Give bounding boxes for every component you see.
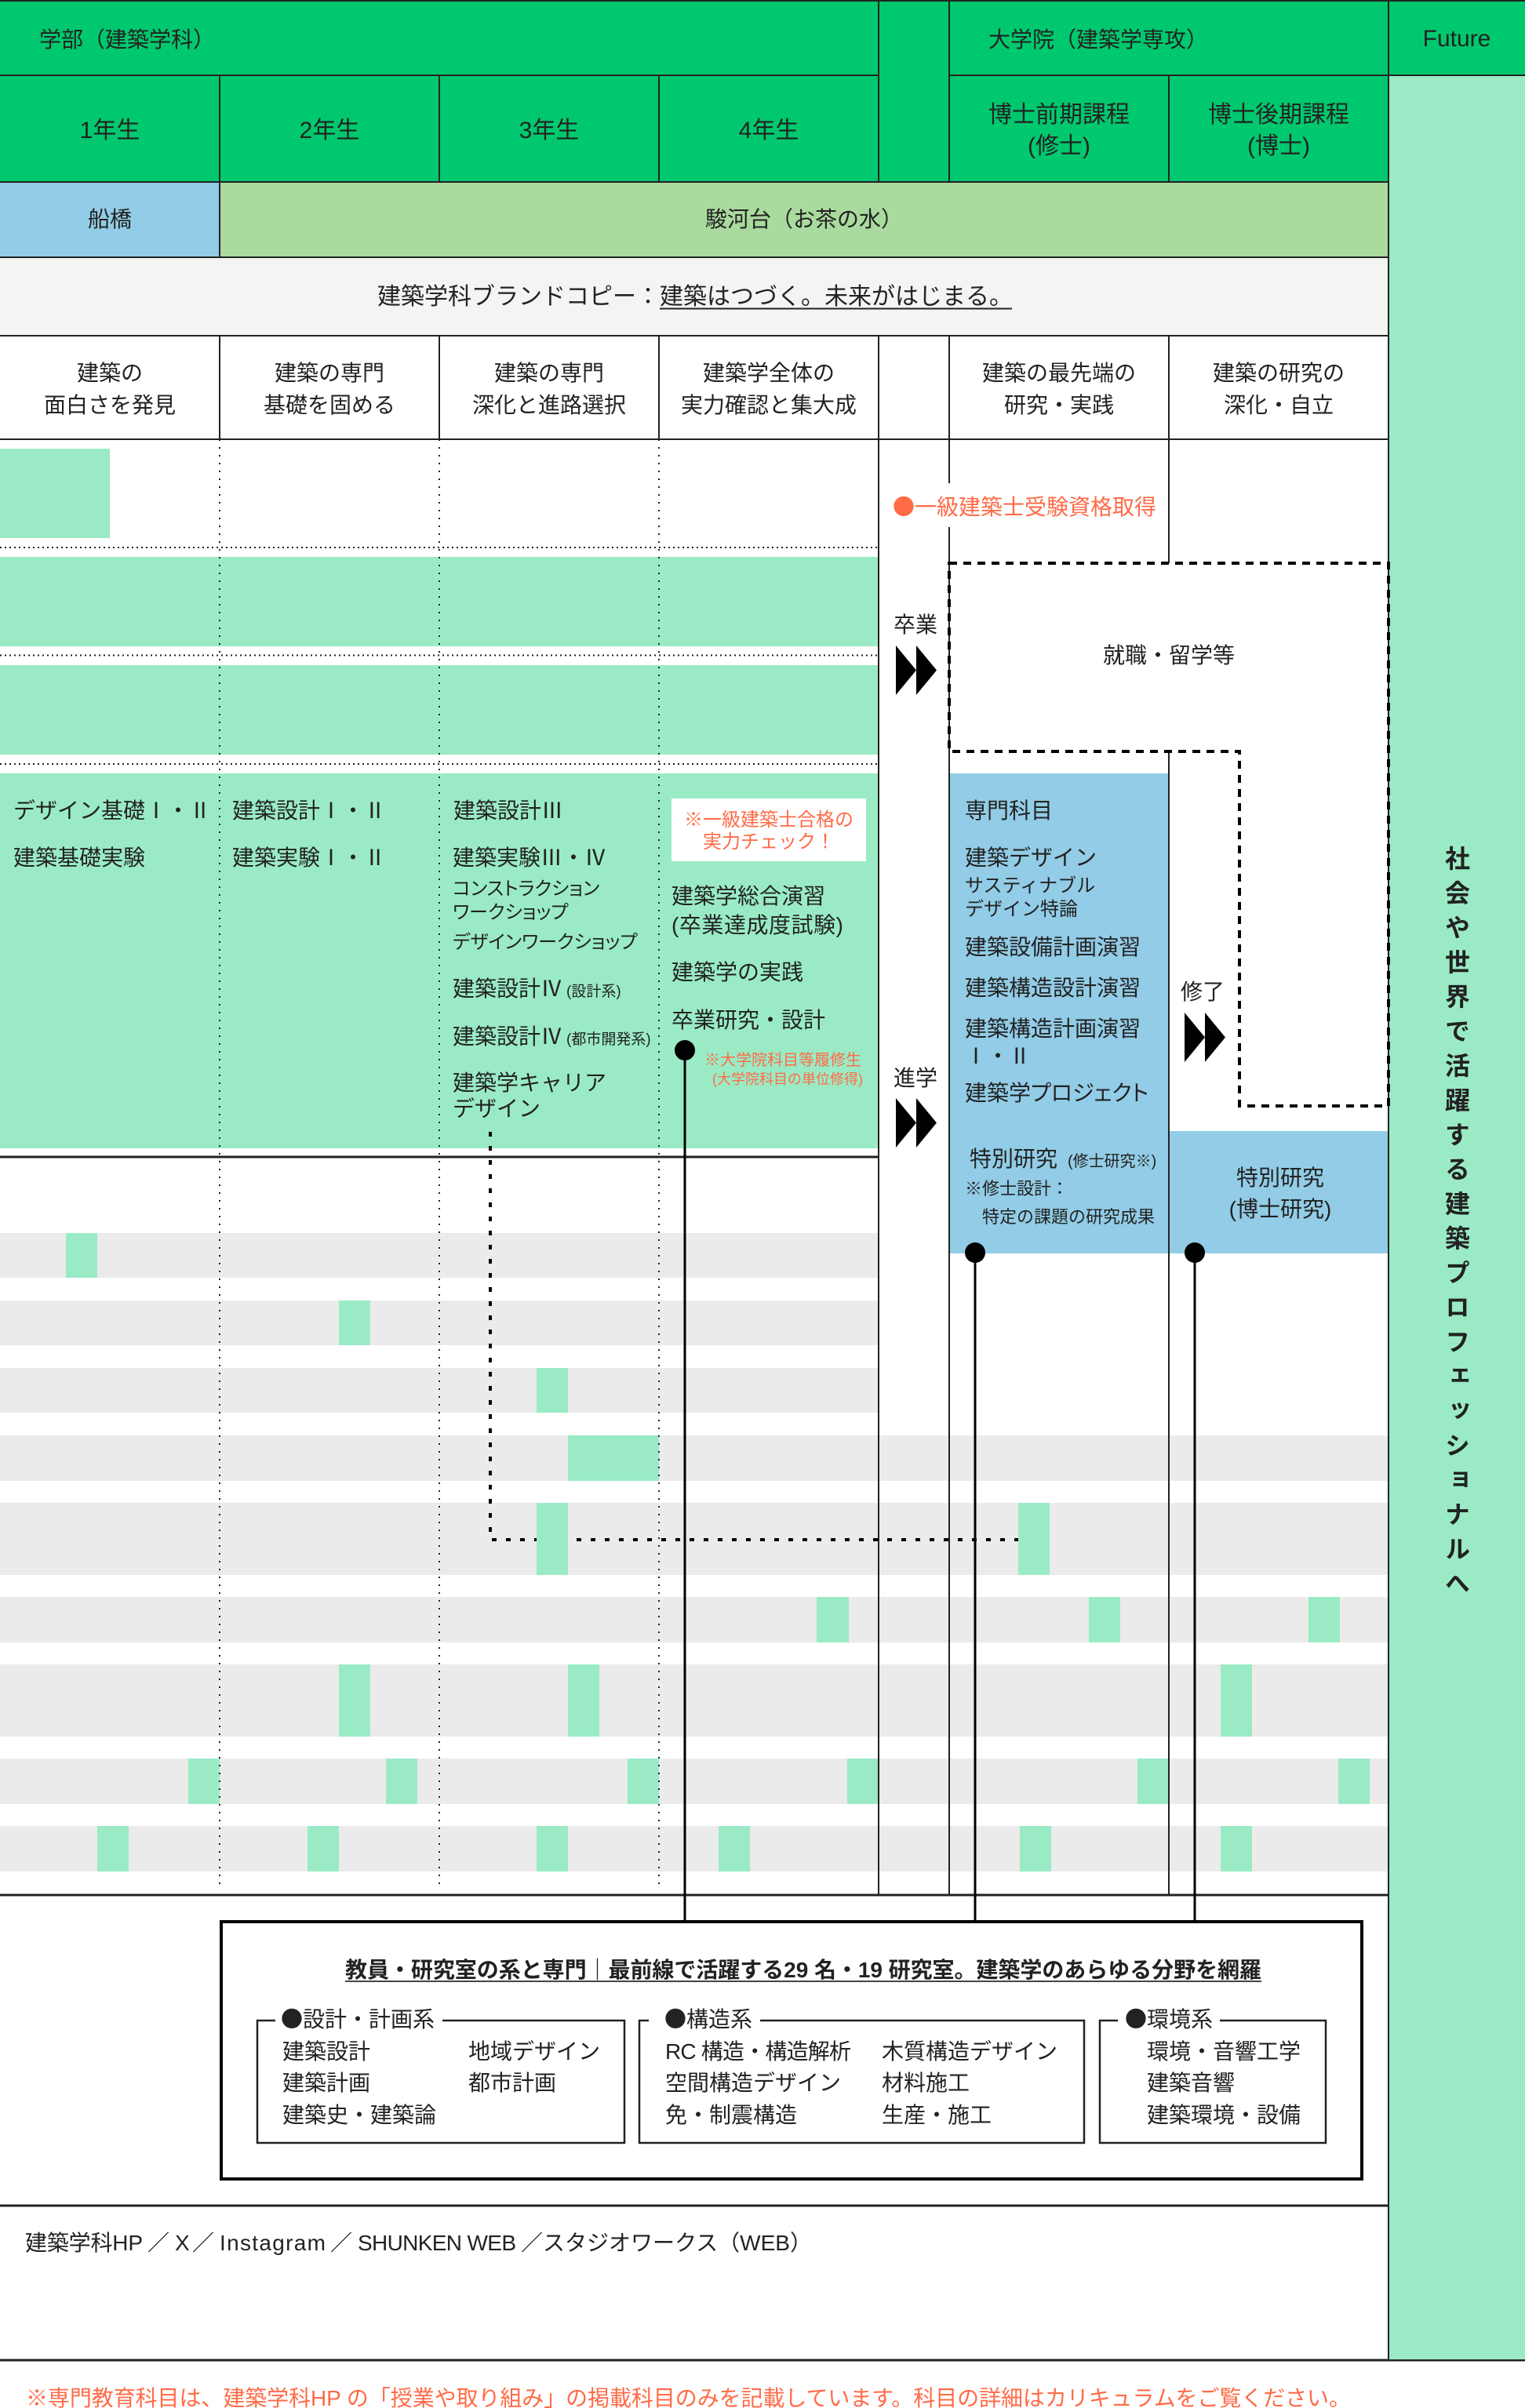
text: year 2 subjects: 建築設計Ⅰ・Ⅱ <box>232 798 386 823</box>
text: vertical future statement: 社会や世界で活躍する建築プロフェッショナルへ <box>1442 846 1470 1605</box>
text: year 3 subjects: デザインワークショップ <box>453 932 638 953</box>
text: links: X <box>175 2231 190 2255</box>
panel: design and planning group: 地域デザイン <box>468 2039 600 2064</box>
text: links: ／ <box>330 2231 352 2255</box>
text: goal year 3: 建築の専門 <box>494 361 604 385</box>
text: year 3 subjects <box>453 798 651 1121</box>
panel: brand copy: 建築学科ブランドコピー：建築はつづく。未来がはじまる。 <box>377 284 1013 310</box>
panel: future column <box>1389 76 1525 2360</box>
text: year 1 subjects <box>13 798 211 870</box>
panel: design and planning group: 建築計画 <box>282 2071 370 2095</box>
panel: environment group: 建築環境・設備 <box>1147 2103 1301 2127</box>
panel: environment group: 建築音響 <box>1147 2071 1235 2095</box>
text: goal year 1: 建築の <box>77 361 143 385</box>
heading: faculty title: 教員・研究室の系と専門｜最前線で活躍する29 名・19 研究室。建築学のあらゆる分野を網羅 <box>345 1958 1261 1982</box>
text: goal master: 建築の最先端の <box>982 361 1136 385</box>
callout: graduate subject credits <box>704 1051 863 1087</box>
panel: structures group: 材料施工 <box>882 2071 970 2095</box>
panel: header years and programmes <box>0 0 1525 182</box>
callout: graduate subject credits: ※大学院科目等履修生 <box>704 1051 861 1069</box>
arrow: advance to graduate school: 進学 <box>894 1066 937 1090</box>
text: goal doctor: 深化・自立 <box>1224 393 1334 417</box>
panel: structures group: 生産・施工 <box>882 2103 992 2127</box>
text: master subjects: 建築構造設計演習 <box>965 976 1141 1000</box>
text: links: ／ <box>521 2231 543 2255</box>
heading: graduate school: 大学院（建築学専攻） <box>988 27 1208 52</box>
text: year 3 subjects: コンストラクション <box>453 878 600 900</box>
text: master subjects: 建築構造計画演習 <box>965 1017 1141 1041</box>
label: Surugadai campus: 駿河台（お茶の水） <box>705 207 903 231</box>
text: year 4 subjects: 建築学総合演習 <box>672 884 825 908</box>
text: year 2 subjects: 建築実験Ⅰ・Ⅱ <box>232 846 386 870</box>
chart: mint activity markers <box>66 1233 1370 1871</box>
text: links <box>25 2231 812 2255</box>
label: year 4: 4年生 <box>739 118 799 144</box>
text: master subjects: 専門科目 <box>965 798 1053 823</box>
callout: architect exam check <box>672 798 866 861</box>
text: links: 建築学科HP <box>25 2231 143 2255</box>
label: doctoral course: 博士後期課程 <box>1208 102 1349 128</box>
arrow: master completion: 修了 <box>1181 980 1225 1004</box>
text: master subjects: ※修士設計： <box>965 1179 1068 1199</box>
text: year 4 subjects <box>672 884 843 1032</box>
label: doctoral course: (博士) <box>1247 133 1310 159</box>
text: master subjects <box>965 798 1156 1227</box>
arrow: master completion <box>1181 980 1225 1062</box>
label: Funabashi campus: 船橋 <box>88 207 132 231</box>
text: year 3 subjects: 建築実験Ⅲ・Ⅳ <box>453 846 606 870</box>
text: goal doctor: 建築の研究の <box>1213 361 1345 385</box>
text: year 2 subjects <box>232 798 386 870</box>
text: year 3 subjects: 建築設計Ⅳ (都市開発系) <box>453 1024 651 1049</box>
callout: graduate subject credits: (大学院科目の単位修得) <box>712 1071 863 1087</box>
panel: environment group: ●環境系 <box>1125 2002 1213 2034</box>
panel: structures group <box>639 2002 1084 2143</box>
chart: mint subject bands <box>0 449 879 1148</box>
label: master course: (修士) <box>1028 133 1090 159</box>
text: links: ／ <box>147 2231 169 2255</box>
text: links: スタジオワークス（WEB） <box>543 2231 812 2255</box>
text: year 4 subjects: 卒業研究・設計 <box>672 1008 825 1032</box>
label: year 2: 2年生 <box>300 118 359 144</box>
text: year 3 subjects: 建築設計Ⅲ <box>453 798 563 823</box>
text: links: ／ <box>192 2231 214 2255</box>
panel: design and planning group: 建築史・建築論 <box>282 2103 436 2127</box>
text: year 3 subjects: ワークショップ <box>453 902 569 923</box>
text: master subjects: デザイン特論 <box>965 899 1078 920</box>
text: master subjects: 建築デザイン <box>965 846 1097 870</box>
text: year 3 subjects: 建築設計Ⅳ (設計系) <box>453 977 621 1001</box>
text: goal year 2: 基礎を固める <box>264 393 395 417</box>
text: master subjects: Ⅰ・Ⅱ <box>965 1044 1031 1068</box>
callout: first-class architect qualification: ●一級建築士受験資格取得 <box>893 490 1156 522</box>
text: master subjects: 特別研究 (修士研究※) <box>970 1147 1156 1171</box>
callout: architect exam check: ※一級建築士合格の <box>684 809 853 831</box>
panel: environment group <box>1100 2002 1326 2143</box>
label: year 3: 3年生 <box>519 118 579 144</box>
panel: design and planning group: 建築設計 <box>282 2039 370 2064</box>
panel: structures group: 空間構造デザイン <box>665 2071 841 2095</box>
text: goal year 4: 建築学全体の <box>703 361 835 385</box>
text: doctoral research: 特別研究 <box>1236 1166 1324 1190</box>
text: year 1 subjects: 建築基礎実験 <box>13 846 145 870</box>
text: year 1 subjects: デザイン基礎Ⅰ・Ⅱ <box>13 798 211 823</box>
panel: campus row <box>0 182 1389 257</box>
arrow: graduation <box>894 613 937 695</box>
heading: undergraduate: 学部（建築学科） <box>39 27 215 52</box>
panel: year goals <box>0 336 1389 439</box>
text: goal year 3: 深化と進路選択 <box>472 393 626 417</box>
panel: design and planning group: ●設計・計画系 <box>281 2002 435 2034</box>
connector: master line to faculty box <box>965 1242 985 1920</box>
panel: structures group: RC 構造・構造解析 <box>665 2039 851 2064</box>
text: year 3 subjects: 建築学キャリア <box>453 1071 606 1095</box>
connector: doctoral line to faculty box <box>1185 1242 1205 1920</box>
panel: brand copy <box>0 258 1389 336</box>
heading: future: Future <box>1423 26 1490 52</box>
text: master subjects: 特定の課題の研究成果 <box>982 1207 1155 1227</box>
text: doctoral research: (博士研究) <box>1229 1197 1331 1221</box>
panel: employment dashed area <box>949 563 1389 1106</box>
panel: structures group: 免・制震構造 <box>665 2103 797 2127</box>
label: year 1: 1年生 <box>80 118 140 144</box>
text: year 4 subjects: 建築学の実践 <box>672 960 803 984</box>
panel: structures group: ●構造系 <box>664 2002 752 2034</box>
text: master subjects: 建築設備計画演習 <box>965 935 1141 959</box>
text: goal year 4: 実力確認と集大成 <box>681 393 857 417</box>
arrow: advance to graduate school <box>894 1066 937 1148</box>
chart: gray activity bands <box>0 1233 1389 1871</box>
panel: design and planning group <box>257 2002 624 2143</box>
panel: structures group: 木質構造デザイン <box>882 2039 1057 2064</box>
text: goal year 1: 面白さを発見 <box>44 393 176 417</box>
panel: graduate blue blocks <box>949 773 1389 1253</box>
text: goal year 2: 建築の専門 <box>275 361 384 385</box>
text: links: SHUNKEN WEB <box>358 2231 516 2255</box>
panel: design and planning group: 都市計画 <box>468 2071 556 2095</box>
text: goal master: 研究・実践 <box>1004 393 1114 417</box>
panel: environment group: 環境・音響工学 <box>1147 2039 1301 2064</box>
text: employment: 就職・留学等 <box>1103 643 1235 667</box>
connector: career design dashed link <box>490 1132 1018 1540</box>
label: master course: 博士前期課程 <box>988 102 1130 128</box>
text: year 3 subjects: デザイン <box>453 1097 540 1121</box>
arrow: graduation: 卒業 <box>894 613 937 637</box>
connector: undergraduate line to faculty box <box>675 1040 695 1920</box>
text: links: Instagram <box>220 2231 326 2255</box>
text: master subjects: 建築学プロジェクト <box>965 1081 1148 1105</box>
panel: faculty and labs box <box>221 1922 1362 2179</box>
callout: architect exam check: 実力チェック！ <box>703 831 835 853</box>
text: year 4 subjects: (卒業達成度試験) <box>672 913 843 937</box>
text: master subjects: サスティナブル <box>965 875 1095 897</box>
